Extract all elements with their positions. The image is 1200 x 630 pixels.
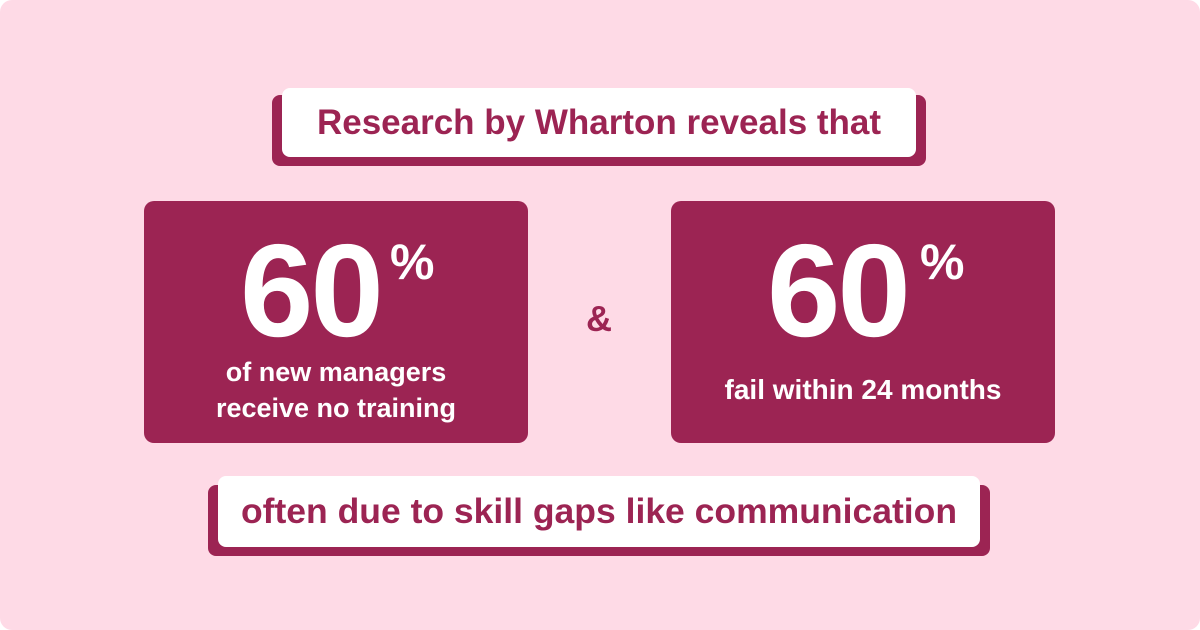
- stat number 1: 60: [240, 217, 381, 364]
- percent sign 1: %: [390, 234, 434, 290]
- heading label: Research by Wharton reveals that: [317, 102, 881, 142]
- percent sign 2: %: [920, 234, 964, 290]
- bottom label: often due to skill gaps like communication: [241, 491, 957, 531]
- caption 1: [216, 357, 456, 423]
- panel: stat 1: [144, 201, 528, 443]
- panel: stat 2: [671, 201, 1055, 443]
- heading label: [272, 88, 926, 166]
- caption 1: receive no training: [216, 393, 456, 423]
- ampersand: &: [586, 298, 612, 339]
- caption 1: of new managers: [226, 357, 446, 387]
- caption 2: fail within 24 months: [725, 374, 1001, 405]
- bottom label: [208, 476, 990, 556]
- stat number 2: 60: [767, 217, 908, 364]
